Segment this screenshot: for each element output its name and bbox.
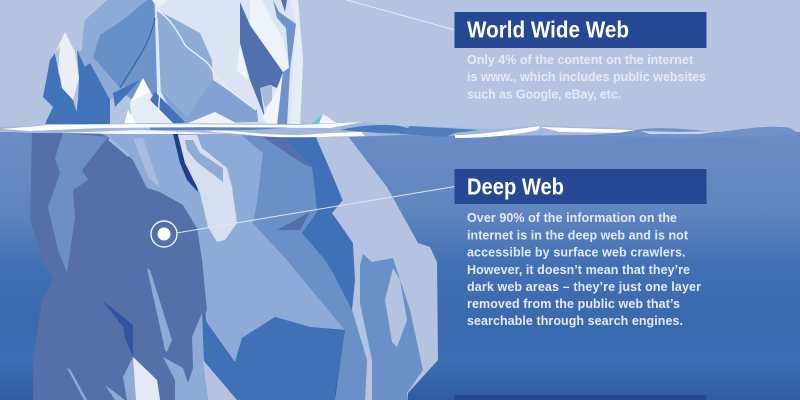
- panel: deep web: [454, 169, 706, 328]
- sea background: [0, 132, 800, 400]
- iceberg below water: [30, 133, 438, 400]
- text block: deep web: Over 90% of the information on the: [467, 211, 677, 225]
- text block: deep web: [467, 211, 701, 328]
- text block: world wide web: is www., which includes public websites: [467, 70, 706, 84]
- text block: deep web: dark web areas – they’re just one layer: [467, 280, 701, 294]
- panel: world wide web: [454, 12, 706, 102]
- heading bar: deep web: [454, 169, 706, 204]
- text block: deep web: However, it doesn’t mean that they’re: [467, 263, 690, 277]
- sky background: [0, 0, 800, 135]
- waterline foam: [0, 122, 800, 138]
- leader line: world wide web: [347, 0, 455, 30]
- text block: world wide web: [467, 53, 706, 102]
- text block: world wide web: such as Google, eBay, etc.: [467, 88, 621, 102]
- heading: world wide web: World Wide Web: [467, 16, 629, 42]
- heading: deep web: Deep Web: [467, 174, 564, 200]
- text block: deep web: removed from the public web that’s: [467, 297, 680, 311]
- text block: deep web: searchable through search engines.: [467, 314, 683, 328]
- heading bar: next section: [454, 395, 706, 400]
- text block: deep web: accessible by surface web crawlers.: [467, 246, 686, 260]
- heading bar: world wide web: [454, 12, 706, 48]
- leader line: deep web: [178, 186, 455, 233]
- iceberg above water: [43, 0, 340, 128]
- text block: world wide web: Only 4% of the content on the internet: [467, 53, 694, 67]
- text block: deep web: internet is in the deep web and is not: [467, 228, 689, 242]
- marker: deep web: [151, 221, 177, 247]
